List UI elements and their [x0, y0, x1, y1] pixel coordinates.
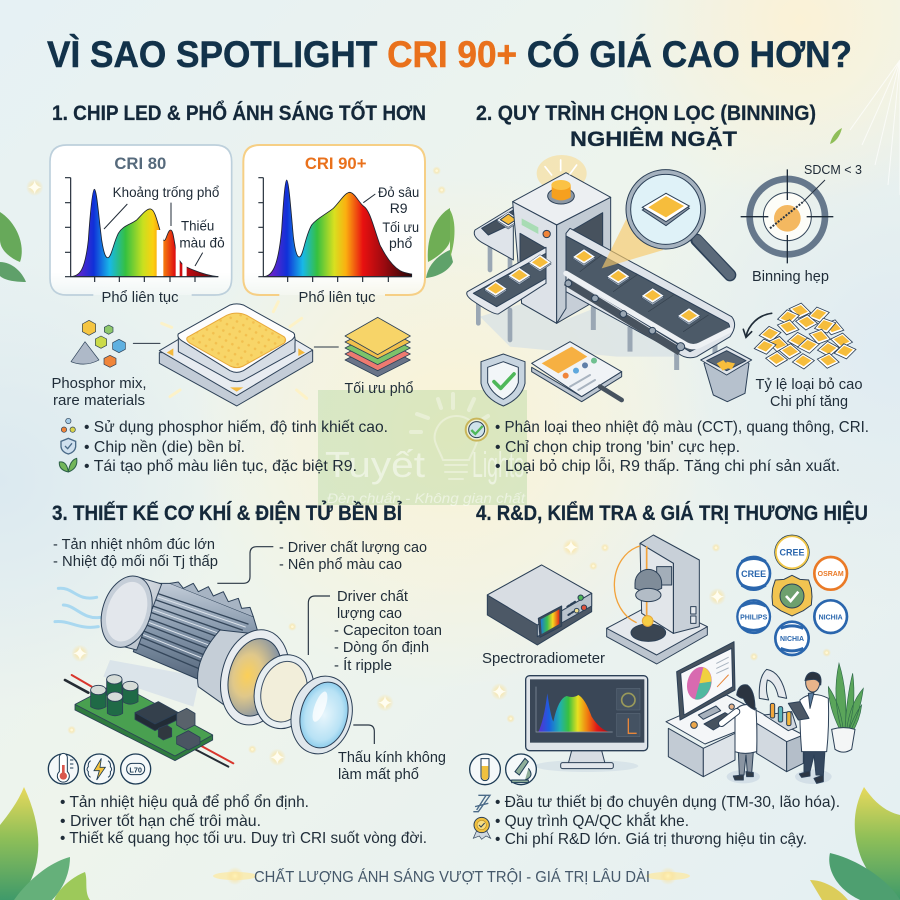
chips on front belt	[484, 255, 551, 298]
icon: handheld tester	[532, 342, 622, 402]
icon: rejected chip pile	[753, 301, 857, 370]
chips on main belt	[573, 249, 700, 325]
badge: CREE blue: CREE	[741, 569, 766, 579]
text: section 2 bullets: • Loại bỏ chip lỗi, R9 thấp. Tăng chi phí sản xuất.	[495, 456, 840, 475]
machine shadow	[480, 303, 680, 357]
person: technician	[722, 685, 757, 780]
icon: test tube	[470, 754, 500, 785]
badge: quality seal	[772, 575, 812, 616]
text: section 2 bullets: • Phân loại theo nhiệt độ màu (CCT), quang thông, CRI.	[495, 419, 869, 436]
text: driver detail notes: - Dòng ổn định	[334, 639, 429, 656]
icon: L70	[121, 754, 151, 784]
text: heat sink notes: - Tản nhiệt nhôm đúc lớn	[53, 536, 215, 553]
text: phosphor label: Phosphor mix,	[52, 375, 146, 392]
icon: phosphor materials	[71, 320, 125, 367]
icon: list check	[466, 419, 488, 441]
caption: CRI 80: Phổ liên tục	[102, 289, 179, 306]
badge: NICHIA right: NICHIA	[819, 614, 843, 621]
text: heat sink notes: - Nhiệt độ mối nối Tj thấp	[53, 553, 218, 570]
rear conveyor	[474, 207, 520, 275]
chart: monitor spectrum	[526, 676, 648, 772]
icon: tools	[473, 795, 490, 812]
leader lines	[217, 547, 374, 744]
text: driver detail notes: lượng cao	[337, 605, 402, 622]
text: driver detail notes: Driver chất	[337, 588, 409, 605]
heading 2	[476, 102, 816, 151]
main conveyor belt	[565, 228, 735, 358]
icon: L70: L70	[129, 765, 142, 774]
workstation monitor	[677, 642, 735, 720]
panel: section 3 illustration	[48, 547, 394, 784]
text: section 3 bullets: • Thiết kế quang học tối ưu. Duy trì CRI suốt vòng đời.	[60, 830, 427, 847]
floor shadows	[727, 769, 832, 784]
watermark: Lights	[472, 444, 524, 485]
panel: CRI 80 card	[50, 145, 232, 295]
icon: COB LED chip	[159, 304, 313, 406]
chip glow rays	[162, 302, 307, 398]
text: section 4 bullets: • Chi phí R&D lớn. Giá trị thương hiệu tin cậy.	[495, 831, 807, 848]
icons: bullet list section 1	[59, 418, 77, 472]
text: driver notes: - Driver chất lượng cao	[279, 539, 427, 556]
magnifier beam	[602, 218, 663, 268]
panel: CRI 90+ card: Đỏ sâu	[378, 184, 419, 200]
icon: phosphor layer stack	[345, 317, 410, 377]
main conveyor legs	[593, 307, 715, 370]
text: SDCM: SDCM < 3	[804, 162, 862, 177]
icon: spectroradiometer	[487, 565, 592, 645]
icon: magnifier	[628, 172, 730, 275]
lens 1	[247, 648, 321, 735]
icon: power	[84, 754, 114, 784]
desk	[666, 669, 803, 777]
text: section 4 bullets	[495, 794, 840, 848]
panel: CRI 90+ card: phổ	[389, 235, 413, 251]
text: driver detail notes: - Capeciton toan	[334, 622, 442, 639]
brand badges	[737, 535, 847, 655]
panel: CRI 80 card: Khoảng trống phổ	[113, 184, 220, 200]
person: engineer	[788, 672, 829, 783]
text: phosphor label	[52, 375, 146, 409]
badge: OSRAM: OSRAM	[818, 571, 844, 578]
badge: CREE gold: CREE	[780, 548, 804, 558]
heading 2: NGHIÊM NGẶT	[570, 127, 737, 151]
panel: section 1 illustration	[26, 145, 446, 472]
panel: CRI 90+ card: R9	[390, 200, 408, 216]
bottom left leaves	[0, 787, 90, 900]
heatsink	[133, 582, 257, 680]
glow behind lamp	[537, 155, 587, 192]
text: phosphor label: rare materials	[53, 392, 145, 409]
text: section 3 bullets: • Tản nhiệt hiệu quả để phổ ổn định.	[60, 793, 309, 811]
icon: integrating tester	[607, 535, 707, 664]
text: section 2 bullets: • Chỉ chọn chip trong 'bin' cực hẹp.	[495, 439, 740, 456]
text: rejection rate	[756, 376, 862, 410]
bottom right leaves	[810, 787, 900, 900]
panel: section 4 illustration	[470, 535, 847, 839]
text: section 3 bullets: • Driver tốt hạn chế trôi màu.	[60, 813, 261, 830]
icon: reject bin	[701, 347, 752, 402]
text: section 1 bullets: • Sử dụng phosphor hiếm, độ tinh khiết cao.	[84, 419, 388, 436]
text: rejection rate: Tỷ lệ loại bỏ cao	[756, 376, 862, 393]
text: optimized label: Tối ưu phổ	[344, 380, 414, 397]
heading 3: 3. THIẾT KẾ CƠ KHÍ & ĐIỆN TỬ BỀN BỈ	[52, 501, 402, 525]
text: driver notes: - Nên phổ màu cao	[279, 556, 402, 573]
board shadow	[103, 660, 200, 707]
panel: CRI 90+ card: CRI 90+	[305, 154, 367, 173]
text: section 2 bullets	[495, 419, 869, 475]
orange orbit	[614, 546, 640, 623]
inspection gantry	[513, 173, 611, 323]
chart: CRI 80 spectrum	[65, 178, 218, 282]
watermark: Tuyết	[325, 444, 425, 485]
text: driver detail notes	[334, 588, 442, 674]
text: rejection rate: Chi phí tăng	[770, 393, 848, 410]
text: section 3 bullets	[60, 793, 427, 847]
panel: CRI 80 card: CRI 80	[114, 154, 166, 173]
panel: CRI 80 card: màu đỏ	[179, 234, 225, 250]
icon: lamp housing exploded	[93, 569, 360, 760]
panel: section 2 machine illustration	[467, 155, 735, 370]
icon: thermometer	[48, 753, 78, 784]
lens 2	[283, 670, 360, 760]
caption: CRI 90: Phổ liên tục	[298, 289, 376, 306]
watermark: Đèn chuẩn - Không gian chất	[327, 490, 526, 506]
text: section 1 bullets: • Chip nền (die) bền bỉ.	[84, 439, 245, 456]
text: section 1 bullets: • Tái tạo phổ màu liên tục, đặc biệt R9.	[84, 457, 357, 475]
icon: driver board	[65, 675, 233, 767]
decorative leaves left	[0, 212, 26, 282]
panel: CRI 90+ card: Tối ưu	[382, 219, 419, 235]
text: lens note: Thấu kính không	[338, 749, 446, 766]
panel: section 2 accessories	[466, 169, 857, 441]
text: section 1 bullets	[84, 419, 388, 475]
front conveyor	[467, 247, 546, 340]
icon: shield check	[481, 354, 525, 406]
chart: CRI 90+ spectrum	[258, 178, 412, 282]
icon: arrow	[743, 313, 772, 337]
text: section 4 bullets: • Quy trình QA/QC khắt khe.	[495, 811, 689, 830]
title: VÌ SAO SPOTLIGHT CRI 90+ CÓ GIÁ CAO HƠN?	[47, 33, 852, 75]
text: heat sink notes	[53, 536, 218, 570]
text: lens note: làm mất phổ	[338, 766, 419, 783]
icon: airflow	[55, 588, 100, 627]
text: driver notes	[279, 539, 427, 573]
front ring	[198, 622, 299, 732]
icon: microscope	[506, 754, 536, 785]
panel: CRI 80 card: Thiếu	[181, 218, 214, 234]
decorative leaves centre	[426, 128, 842, 278]
text: spectroradiometer: Spectroradiometer	[482, 650, 605, 667]
connector lines	[133, 343, 338, 347]
back cap	[93, 569, 162, 654]
icon: medal	[473, 817, 491, 839]
icon: target SDCM	[741, 169, 833, 263]
signal rays	[545, 160, 577, 175]
text: lens note	[338, 749, 446, 783]
badge: PHILIPS: PHILIPS	[740, 614, 768, 621]
panel: lab scene	[666, 642, 863, 784]
icon: potted plant	[828, 663, 863, 752]
heading 2: 2. QUY TRÌNH CHỌN LỌC (BINNING)	[476, 102, 816, 125]
badge: NICHIA lower: NICHIA	[780, 636, 804, 643]
text: driver detail notes: - Ít ripple	[334, 657, 392, 674]
text: narrow binning: Binning hẹp	[752, 268, 829, 285]
panel: CRI 90+ card	[243, 145, 425, 295]
heading 1: 1. CHIP LED & PHỔ ÁNH SÁNG TỐT HƠN	[52, 101, 426, 125]
watermark	[318, 390, 527, 506]
footer tagline: CHẤT LƯỢNG ÁNH SÁNG VƯỢT TRỘI - GIÁ TRỊ LÂU DÀI	[254, 867, 650, 886]
text: section 4 bullets: • Đầu tư thiết bị đo chuyên dụng (TM-30, lão hóa).	[495, 794, 840, 811]
